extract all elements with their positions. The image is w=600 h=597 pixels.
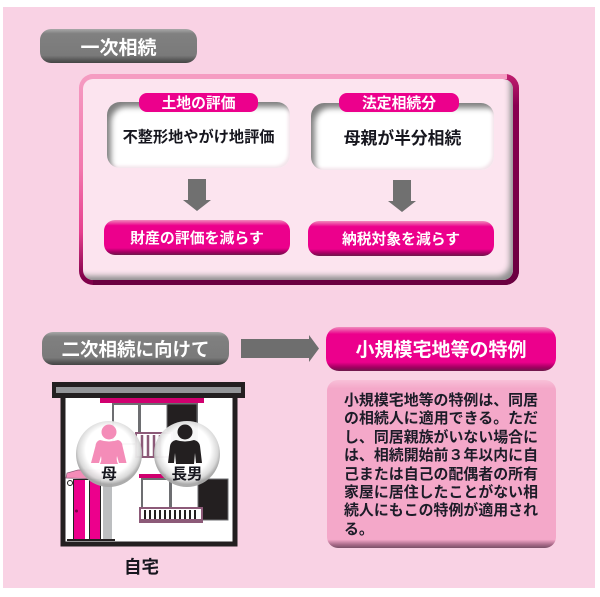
lower floor windows xyxy=(139,474,228,522)
left result button xyxy=(104,220,290,255)
roof xyxy=(52,382,245,398)
text block: special rule explanation: る。 xyxy=(344,522,374,538)
arrow: left down xyxy=(183,179,211,211)
heading: small-scale residential land special rule: 小規模宅地等の特例 xyxy=(355,340,526,360)
entrance door xyxy=(66,470,115,541)
left label: land valuation: 土地の評価 xyxy=(162,96,236,112)
heading: towards secondary inheritance: 二次相続に向けて xyxy=(61,338,210,360)
panel bottom edge xyxy=(93,277,519,285)
arrow: right xyxy=(241,335,319,362)
text block: special rule explanation: 小規模宅地等の特例は、同居 xyxy=(344,393,538,409)
text block: special rule explanation: の相続人に適用できる。ただ xyxy=(344,411,538,427)
upper floor windows xyxy=(100,398,204,457)
heading: primary inheritance: 一次相続 xyxy=(80,38,156,58)
left box: land valuation xyxy=(107,102,290,168)
icon: mother xyxy=(76,421,142,487)
arrow: right down xyxy=(388,180,416,212)
text block: special rule explanation: 家屋に居住したことがない相 xyxy=(344,485,538,501)
panel right edge xyxy=(499,74,519,285)
caption: own home: 自宅 xyxy=(124,556,159,576)
right result button xyxy=(308,221,494,256)
text panel: special rule explanation xyxy=(327,380,556,548)
right result button: 納税対象を減らす xyxy=(342,232,460,248)
panel: primary inheritance measures xyxy=(79,74,519,285)
heading: towards secondary inheritance xyxy=(42,332,229,365)
heading: primary inheritance xyxy=(40,29,197,63)
label: mother: 母 xyxy=(101,466,117,483)
right label: statutory share: 法定相続分 xyxy=(362,96,436,112)
right box: statutory share: 母親が半分相続 xyxy=(344,129,461,148)
text block: special rule explanation: 続人にもこの特例が適用され xyxy=(344,503,538,519)
heading: small-scale residential land special rule xyxy=(326,327,556,371)
panel top edge xyxy=(89,74,507,79)
text block: special rule explanation: は、相続開始前３年以内に自 xyxy=(344,448,538,464)
text block: special rule explanation: 己または自己の配偶者の所有 xyxy=(344,467,538,483)
walls xyxy=(63,392,235,544)
icon: eldest son xyxy=(154,421,220,487)
left box: land valuation: 不整形地やがけ地評価 xyxy=(123,129,274,146)
left label: land valuation xyxy=(139,93,258,112)
panel inner face xyxy=(83,79,513,280)
label: eldest son: 長男 xyxy=(171,466,202,483)
text block: special rule explanation xyxy=(344,392,538,538)
right label: statutory share xyxy=(339,93,459,112)
text block: special rule explanation: し、同居親族がいない場合に xyxy=(344,430,538,446)
left result button: 財産の評価を減らす xyxy=(130,231,264,247)
right box: statutory share xyxy=(311,103,494,170)
